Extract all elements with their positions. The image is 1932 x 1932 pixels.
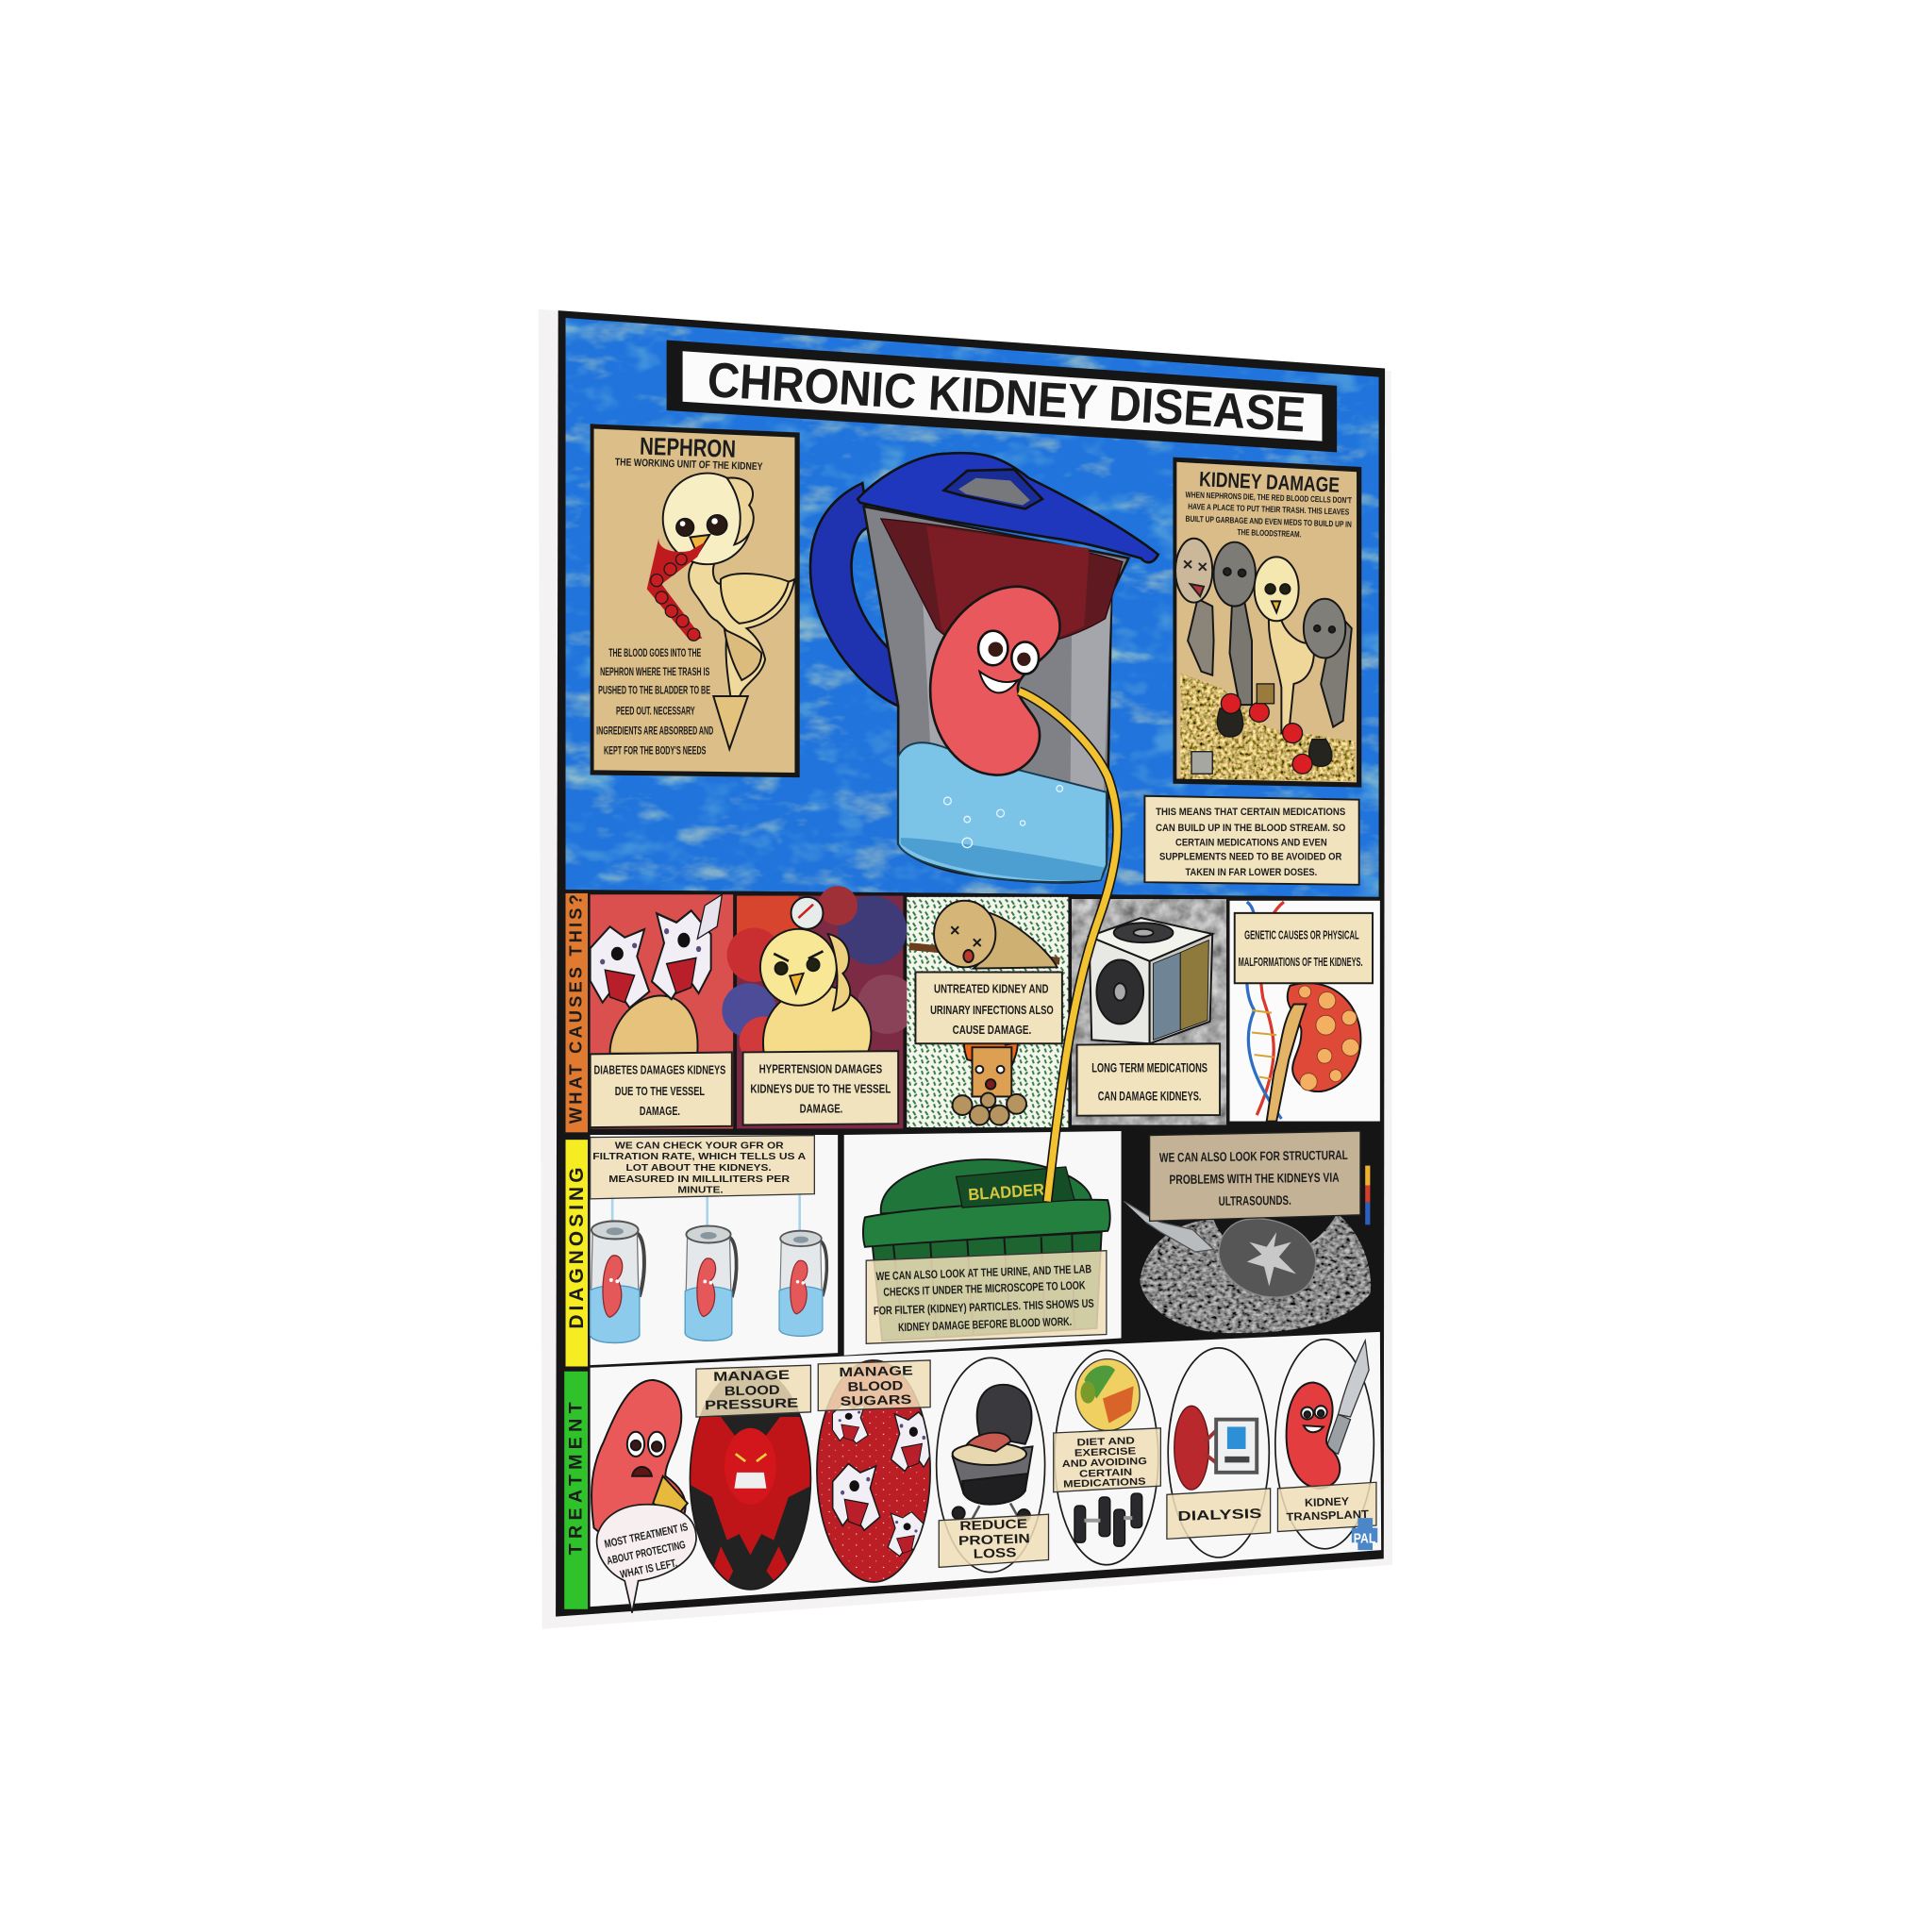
label: treatment: [564, 1372, 588, 1609]
text: diabetes: [591, 1052, 732, 1127]
text: genetic causes: [1235, 913, 1373, 983]
text: urine explanation: KIDNEY DAMAGE BEFORE BLOOD WORK.: [898, 1315, 1072, 1334]
callout: speech bubble: [597, 1505, 696, 1613]
callout: medications: CAN BUILD UP IN THE BLOOD STREAM. SO: [1156, 823, 1345, 834]
icon: diet and exercise oval: [1055, 1351, 1158, 1565]
heading: kidney damage: KIDNEY DAMAGE: [1199, 467, 1341, 497]
bladder label: BLADDER: [968, 1180, 1045, 1204]
panel: ultrasound: [1124, 1124, 1380, 1340]
clean water reservoir: [898, 742, 1107, 882]
title banner: CHRONIC KIDNEY DISEASE: [706, 353, 1307, 443]
text: hypertension: KIDNEYS DUE TO THE VESSEL: [750, 1082, 891, 1096]
panel: nephron: [591, 424, 800, 777]
panel: blue hero background: [566, 318, 1379, 897]
text: infections: URINARY INFECTIONS ALSO: [930, 1003, 1054, 1017]
panel: long term medications: [1072, 899, 1226, 1124]
icon: PAL logo: [1352, 1518, 1377, 1550]
text: manage blood pressure: [696, 1365, 810, 1417]
panel: genetic causes: [1230, 901, 1380, 1122]
text: ultrasound explanation: WE CAN ALSO LOOK FOR STRUCTURAL: [1159, 1148, 1348, 1165]
text: ultrasound explanation: [1150, 1131, 1360, 1221]
text: manage blood sugars: SUGARS: [840, 1392, 912, 1408]
panel: urine test: [844, 1131, 1122, 1356]
text: nephron explanation: KEPT FOR THE BODY'S NEEDS: [604, 744, 707, 757]
text: genetic causes: MALFORMATIONS OF THE KIDNEYS.: [1239, 955, 1363, 969]
text: GFR explanation: FILTRATION RATE, WHICH TELLS US A: [592, 1152, 807, 1162]
text: infections: [915, 973, 1062, 1043]
panel: treatment: [591, 1332, 1381, 1613]
text: infections: UNTREATED KIDNEY AND: [934, 982, 1049, 996]
text: manage blood pressure: PRESSURE: [705, 1396, 798, 1412]
text: diet and exercise: DIET AND: [1076, 1436, 1136, 1448]
icon: happy kidney: [1287, 1382, 1340, 1489]
text: infections: CAUSE DAMAGE.: [953, 1023, 1031, 1037]
dirty blood reservoir: [881, 519, 1123, 649]
arrow: ureter tube from kidney to bladder: [1019, 691, 1117, 1201]
text: hypertension: DAMAGE.: [800, 1101, 842, 1115]
icon: blood sugar oval with sharks: [817, 1360, 932, 1582]
text: urine explanation: CHECKS IT UNDER THE MICROSCOPE TO LOOK: [883, 1278, 1086, 1299]
text: nephron explanation: [596, 647, 713, 757]
label: diagnosing: DIAGNOSING: [566, 1168, 588, 1329]
text: long term medications: [1077, 1043, 1220, 1116]
text: reduce protein loss: PROTEIN: [958, 1531, 1030, 1548]
icon: dumbbells: [1074, 1493, 1142, 1546]
text: diet and exercise: MEDICATIONS: [1063, 1477, 1146, 1491]
icon: burning cracker on campfire: [953, 1033, 1026, 1124]
text: hypertension: [743, 1051, 898, 1124]
icon: three shrinking filter pitchers: [591, 1192, 826, 1342]
text: urine explanation: WE CAN ALSO LOOK AT THE URINE, AND THE LAB: [875, 1262, 1091, 1283]
icon: ultrasound transducer: [1124, 1201, 1214, 1252]
text: nephron explanation: PUSHED TO THE BLADDER TO BE: [598, 684, 710, 696]
ultrasound scan image: [1134, 1214, 1377, 1337]
icon: nephron duck mascot: [663, 474, 794, 749]
text: genetic causes: GENETIC CAUSES OR PHYSICAL: [1244, 927, 1359, 941]
icon: grill oval: [937, 1357, 1045, 1573]
panel: GFR test: [591, 1135, 838, 1365]
panel: hypertension: [722, 886, 917, 1128]
text: reduce protein loss: LOSS: [973, 1545, 1017, 1561]
text: kidney damage explanation: THE BLOODSTREAM.: [1237, 527, 1302, 539]
text: manage blood sugars: [818, 1360, 930, 1411]
text: urine explanation: FOR FILTER (KIDNEY) PARTICLES. THIS SHOWS US: [874, 1297, 1094, 1318]
nephron subtitle: THE WORKING UNIT OF THE KIDNEY: [615, 457, 763, 473]
icon: bladder trash bin: [863, 1159, 1110, 1341]
callout: speech bubble: MOST TREATMENT IS: [604, 1521, 690, 1551]
text: hypertension: HYPERTENSION DAMAGES: [759, 1062, 882, 1076]
text: ultrasound explanation: PROBLEMS WITH THE KIDNEYS VIA: [1169, 1171, 1340, 1187]
text: kidney transplant: [1277, 1482, 1376, 1532]
text: ultrasound explanation: ULTRASOUNDS.: [1219, 1193, 1291, 1208]
icon: dialysis oval: [1168, 1348, 1269, 1557]
panel: diagnosing row backing: [566, 1126, 1379, 1370]
text: GFR explanation: MEASURED IN MILLILITERS PER: [608, 1174, 791, 1185]
icon: roasted nephron: [909, 901, 1059, 969]
callout: speech bubble: WHAT IS LEFT.: [619, 1557, 678, 1581]
icon: sugar sharks biting kidney: [591, 894, 722, 1054]
ultrasound colour scale: [1365, 1166, 1370, 1224]
icon: filter pitcher: [810, 453, 1158, 882]
label: treatment: TREATMENT: [565, 1402, 586, 1555]
text: manage blood pressure: BLOOD: [724, 1383, 780, 1398]
text: kidney damage explanation: WHEN NEPHRONS DIE, THE RED BLOOD CELLS DON'T: [1185, 490, 1352, 505]
icon: kidney connected to machine: [1174, 1406, 1257, 1490]
heading: nephron: NEPHRON: [640, 432, 736, 463]
text: manage blood sugars: MANAGE: [839, 1363, 913, 1379]
text: urine explanation: [866, 1251, 1107, 1343]
callout: medications: TAKEN IN FAR LOWER DOSES.: [1185, 867, 1317, 878]
text: diabetes: DAMAGE.: [640, 1104, 680, 1118]
text: diabetes: DIABETES DAMAGES KIDNEYS: [594, 1062, 726, 1076]
text: reduce protein loss: REDUCE: [959, 1517, 1027, 1533]
text: nephron explanation: THE BLOOD GOES INTO THE: [608, 647, 701, 659]
text: GFR explanation: [591, 1136, 814, 1199]
icon: transplant oval: [1275, 1340, 1374, 1549]
text: nephron explanation: INGREDIENTS ARE ABSORBED AND: [596, 724, 713, 737]
text: dialysis: [1167, 1489, 1271, 1539]
label: what causes this: WHAT CAUSES THIS?: [565, 894, 585, 1124]
panel: diabetes: [591, 894, 733, 1128]
icon: blood pressure oval with angry red monster: [690, 1368, 813, 1590]
text: diabetes: DUE TO THE VESSEL: [615, 1084, 705, 1098]
text: dialysis: DIALYSIS: [1177, 1507, 1262, 1524]
icon: food plate: [1075, 1359, 1140, 1430]
callout: medications: THIS MEANS THAT CERTAIN MEDICATIONS: [1156, 807, 1346, 818]
text: manage blood pressure: MANAGE: [713, 1368, 790, 1384]
text: kidney transplant: KIDNEY: [1305, 1495, 1349, 1509]
icon: dna helix: [1247, 902, 1284, 1119]
panel: infections: [907, 897, 1068, 1127]
icon: angry chick with pressure gauge: [760, 897, 871, 1054]
icon: sad kidney: [591, 1380, 688, 1546]
icon: smiling kidney: [930, 587, 1059, 775]
text: manage blood sugars: BLOOD: [847, 1378, 904, 1394]
icon: scalpel: [1338, 1341, 1369, 1417]
text: reduce protein loss: [939, 1514, 1049, 1567]
callout: medications: CERTAIN MEDICATIONS AND EVEN: [1175, 838, 1327, 849]
label: diagnosing: [566, 1140, 588, 1366]
text: kidney damage explanation: [1185, 490, 1352, 539]
icon: red blood cells and trash bags: [1191, 684, 1332, 774]
text: diet and exercise: EXERCISE: [1074, 1446, 1136, 1459]
pitcher body: [864, 507, 1128, 882]
callout: speech bubble: ABOUT PROTECTING: [606, 1539, 687, 1567]
callout: medications: SUPPLEMENTS NEED TO BE AVOIDED OR: [1159, 852, 1342, 863]
text: nephron explanation: NEPHRON WHERE THE TRASH IS: [600, 666, 709, 678]
text: nephron explanation: PEED OUT. NECESSARY: [616, 706, 695, 718]
poster outer black frame: [556, 310, 1385, 1617]
text: GFR explanation: LOT ABOUT THE KIDNEYS.: [626, 1163, 772, 1174]
icon: polycystic kidney: [1267, 983, 1360, 1122]
text: kidney damage explanation: HAVE A PLACE TO PUT THEIR TRASH. THIS LEAVES: [1188, 502, 1349, 517]
pitcher lid: [858, 453, 1158, 562]
icon: blood cell chain: [647, 536, 705, 641]
panel: what causes row backing: [566, 890, 1379, 1134]
illustration: garbage field: [1176, 672, 1359, 785]
text: diet and exercise: CERTAIN: [1079, 1468, 1132, 1480]
panel: kidney damage: [1173, 458, 1361, 788]
icon: air conditioner unit full of pills: [1090, 918, 1212, 1043]
text: kidney damage explanation: BUILT UP GARBAGE AND EVEN MEDS TO BUILD UP IN: [1185, 514, 1352, 529]
text: long term medications: CAN DAMAGE KIDNEYS.: [1098, 1089, 1201, 1103]
text: GFR explanation: MINUTE.: [677, 1185, 724, 1195]
text: GFR explanation: WE CAN CHECK YOUR GFR OR: [615, 1141, 784, 1151]
text: long term medications: LONG TERM MEDICATIONS: [1091, 1060, 1208, 1074]
icon: PAL logo: PAL: [1354, 1531, 1375, 1546]
callout: medications: [1144, 796, 1359, 885]
text: kidney transplant: TRANSPLANT: [1286, 1508, 1370, 1524]
pitcher handle: [810, 483, 898, 706]
text: diet and exercise: [1054, 1428, 1160, 1492]
text: diet and exercise: AND AVOIDING: [1062, 1457, 1147, 1470]
illustration: dying nephrons: [1175, 539, 1352, 733]
canvas print edge: [539, 309, 1392, 1629]
